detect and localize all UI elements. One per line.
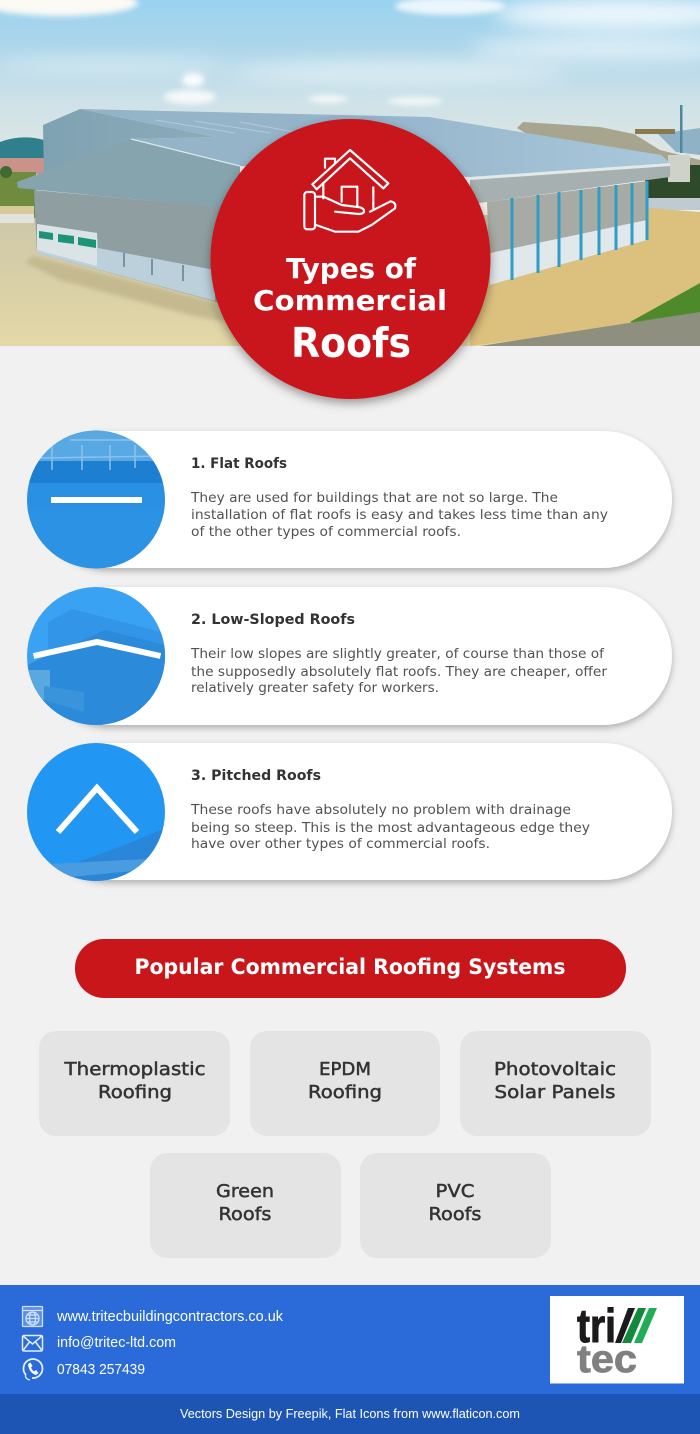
text: email: info@tritec-ltd.com bbox=[57, 1335, 176, 1351]
icon: low-sloped roof circle bbox=[27, 587, 165, 725]
hero photo: commercial building under sky bbox=[0, 0, 700, 346]
logo: tri tec bbox=[550, 1296, 684, 1384]
card: EPDM roofing: Roofing bbox=[308, 1082, 382, 1103]
title circle badge bbox=[210, 119, 490, 399]
logo: tri tec: tri bbox=[577, 1299, 616, 1352]
text: low-sloped roofs bbox=[190, 612, 607, 696]
text: flat roofs: They are used for buildings that are not so large. The bbox=[190, 490, 558, 506]
text: pitched roofs bbox=[190, 768, 590, 852]
icon: telephone bbox=[23, 1359, 42, 1380]
text: website: www.tritecbuildingcontractors.co.uk bbox=[56, 1309, 284, 1325]
card: photovoltaic solar panels: Photovoltaic bbox=[494, 1059, 616, 1080]
card: green roofs: Roofs bbox=[218, 1204, 272, 1225]
card: photovoltaic solar panels bbox=[460, 1031, 651, 1136]
front gable bbox=[17, 139, 240, 210]
text: flat roofs: 1. Flat Roofs bbox=[191, 456, 287, 472]
text: pitched roofs: have over other types of commercial roofs. bbox=[191, 836, 490, 852]
card: photovoltaic solar panels: Solar Panels bbox=[494, 1082, 616, 1103]
footer credits band: Vectors Design by Freepik, Flat Icons from www.flaticon.com bbox=[180, 1407, 520, 1421]
text: pitched roofs: being so steep. This is the most advantageous edge they bbox=[191, 820, 590, 836]
card: green roofs bbox=[150, 1153, 341, 1258]
back gable bbox=[43, 109, 215, 176]
section banner: popular commercial roofing systems: Popular Commercial Roofing Systems bbox=[134, 955, 566, 979]
card: green roofs: Green bbox=[216, 1181, 274, 1202]
fascia and wall right bbox=[470, 163, 670, 204]
roof plane bbox=[80, 109, 670, 177]
text: phone: 07843 257439 bbox=[57, 1362, 145, 1378]
card: EPDM roofing bbox=[250, 1031, 440, 1136]
text: flat roofs: of the other types of commercial roofs. bbox=[191, 524, 461, 540]
text: low-sloped roofs: the supposedly absolutely flat roofs. They are cheaper, offer bbox=[191, 664, 607, 680]
title text: Roofs bbox=[291, 319, 411, 367]
panel: low-sloped roofs bbox=[27, 587, 672, 725]
text: low-sloped roofs: 2. Low-Sloped Roofs bbox=[191, 612, 355, 628]
card: thermoplastic roofing bbox=[39, 1031, 230, 1136]
section banner: popular commercial roofing systems bbox=[75, 939, 626, 998]
card: PVC roofs: Roofs bbox=[428, 1204, 482, 1225]
card: EPDM roofing: EPDM bbox=[319, 1059, 371, 1080]
panel: flat roofs bbox=[27, 430, 672, 568]
card: PVC roofs: PVC bbox=[436, 1181, 474, 1202]
icon: pitched roof circle bbox=[27, 743, 165, 881]
wall left bbox=[34, 190, 220, 302]
logo: tri tec: tec bbox=[577, 1338, 637, 1381]
card: thermoplastic roofing: Roofing bbox=[98, 1082, 172, 1103]
distant dome and buildings bbox=[0, 137, 44, 160]
icon: email envelope bbox=[22, 1336, 42, 1351]
footer contact band bbox=[0, 1285, 700, 1394]
text: pitched roofs: These roofs have absolutely no problem with drainage bbox=[190, 802, 571, 818]
title text: Commercial bbox=[253, 284, 447, 317]
text: low-sloped roofs: Their low slopes are slightly greater, of course than those of bbox=[190, 646, 605, 662]
icon: house held in hand bbox=[304, 150, 395, 232]
text: low-sloped roofs: relatively greater safety for workers. bbox=[191, 680, 439, 696]
panel: pitched roofs bbox=[27, 743, 672, 881]
card: PVC roofs bbox=[360, 1153, 551, 1258]
title text bbox=[253, 252, 447, 367]
icon: flat roof circle bbox=[27, 430, 165, 568]
text: pitched roofs: 3. Pitched Roofs bbox=[191, 768, 321, 784]
text: flat roofs bbox=[190, 456, 608, 540]
title text: Types of bbox=[286, 252, 417, 285]
sand yard bbox=[470, 208, 700, 346]
icon: website globe bbox=[22, 1306, 42, 1326]
footer credits band bbox=[0, 1394, 700, 1434]
card: thermoplastic roofing: Thermoplastic bbox=[63, 1059, 206, 1080]
text: flat roofs: installation of flat roofs is easy and takes less time than any bbox=[191, 507, 608, 523]
